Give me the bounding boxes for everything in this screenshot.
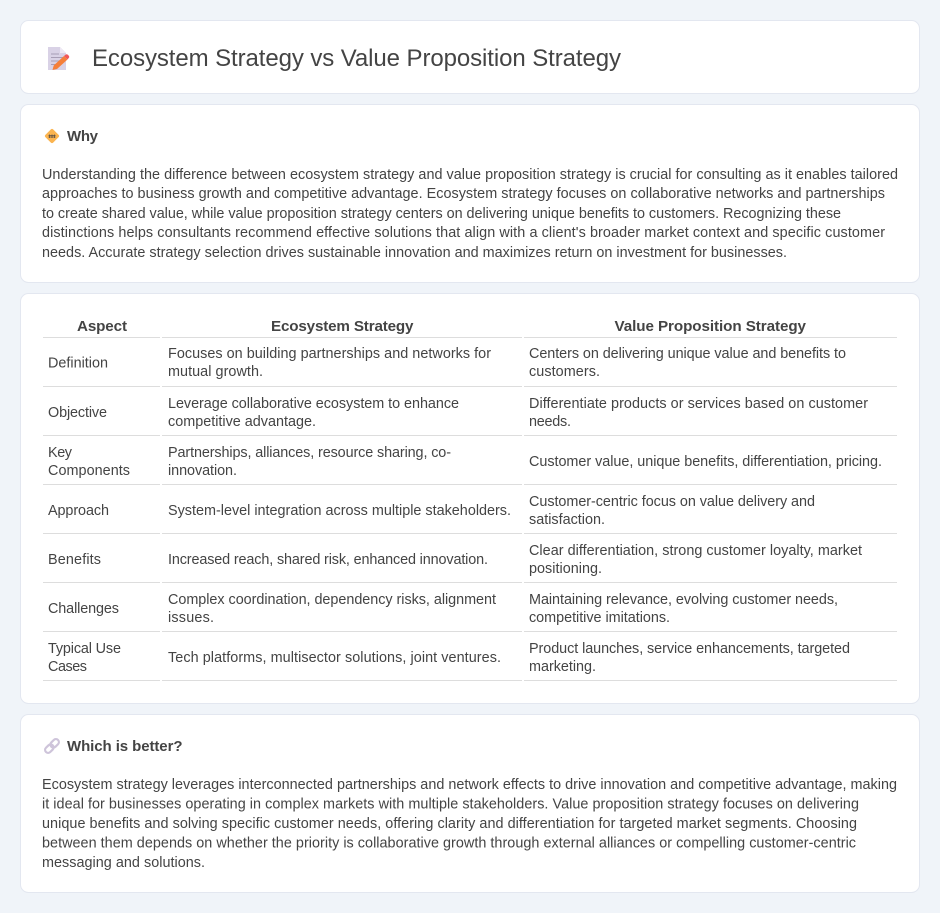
row: key components: innovation. xyxy=(168,463,237,479)
row: typical use cases xyxy=(48,641,850,675)
row: challenges: Complex coordination, dependency risks, alignment xyxy=(168,592,496,608)
row: challenges: issues. xyxy=(168,610,214,626)
text block: why paragraph: to create shared value, while value proposition strategy centers on delivering unique benefits to customers. Recognizing these xyxy=(42,206,841,222)
row: challenges xyxy=(48,592,838,626)
row: benefits: Benefits xyxy=(48,552,101,568)
row: approach: Approach xyxy=(48,503,109,519)
text block: which is better paragraph: unique benefits and solving specific customer needs, offering clarity and differentiation for targeted market segments. Choosing xyxy=(42,816,857,832)
row: approach xyxy=(48,494,815,528)
row: objective xyxy=(48,396,868,430)
icon: chain link xyxy=(44,738,60,754)
row: typical use cases: Typical Use xyxy=(48,641,121,657)
row: definition: Definition xyxy=(48,356,108,372)
text block: why paragraph: Understanding the difference between ecosystem strategy and value proposition strategy is crucial for consulting as it enables tailored xyxy=(42,167,898,183)
row: key components: Key xyxy=(48,445,73,461)
row: challenges: Maintaining relevance, evolving customer needs, xyxy=(529,592,838,608)
row: challenges: competitive imitations. xyxy=(529,610,670,626)
row: typical use cases: Tech platforms, multisector solutions, joint ventures. xyxy=(168,650,501,666)
table header: Ecosystem Strategy xyxy=(271,318,414,335)
table header: Value Proposition Strategy xyxy=(614,318,807,335)
row: key components xyxy=(48,445,882,479)
table header xyxy=(77,318,807,335)
text block: why paragraph: distinctions helps consultants recommend effective solutions that align with a client's broader market context and specific customer xyxy=(42,225,885,241)
panel: header xyxy=(20,20,920,94)
row: benefits: Clear differentiation, strong customer loyalty, market xyxy=(529,543,862,559)
title: Ecosystem Strategy vs Value Proposition Strategy xyxy=(92,45,621,72)
heading: why: Why xyxy=(67,128,99,145)
row: key components: Customer value, unique benefits, differentiation, pricing. xyxy=(529,454,882,470)
row: approach: System-level integration across multiple stakeholders. xyxy=(168,503,511,519)
row: objective: Leverage collaborative ecosystem to enhance xyxy=(168,396,459,412)
text block: which is better paragraph: it ideal for businesses operating in complex markets with multiple stakeholders. Value proposition strategy focuses on delivering xyxy=(42,796,859,812)
panel: comparison table xyxy=(20,294,920,704)
row: definition: mutual growth. xyxy=(168,364,263,380)
text block: which is better paragraph: Ecosystem strategy leverages interconnected partnerships and network effects to drive innovation and competitive advantage, making xyxy=(42,777,897,793)
row: approach: satisfaction. xyxy=(529,512,605,528)
row: benefits xyxy=(48,543,862,577)
text block: which is better paragraph: between them depends on whether the priority is collaborative growth through external alliances or compelling customer-centric xyxy=(42,836,856,852)
icon: document with pencil xyxy=(48,47,69,70)
panel: which is better xyxy=(20,714,920,892)
row: objective: Differentiate products or services based on customer xyxy=(529,396,868,412)
row: key components: Partnerships, alliances, resource sharing, co- xyxy=(168,445,451,461)
row: definition: customers. xyxy=(529,364,600,380)
row: key components: Components xyxy=(48,463,130,479)
text block: why paragraph: needs. Accurate strategy selection drives sustainable innovation and maximizes return on investment for businesses. xyxy=(42,245,787,261)
text block: which is better paragraph: messaging and solutions. xyxy=(42,855,205,871)
row: definition xyxy=(48,346,846,380)
row: approach: Customer-centric focus on value delivery and xyxy=(529,494,815,510)
row: definition: Focuses on building partnerships and networks for xyxy=(168,346,491,362)
panel: why xyxy=(20,104,920,282)
row: benefits: Increased reach, shared risk, enhanced innovation. xyxy=(168,552,488,568)
icon: warning diamond xyxy=(44,128,60,144)
text block: why paragraph xyxy=(42,167,898,261)
row: benefits: positioning. xyxy=(529,561,602,577)
row: objective: needs. xyxy=(529,414,571,430)
row: challenges: Challenges xyxy=(48,601,119,617)
row: objective: competitive advantage. xyxy=(168,414,316,430)
heading: which is better: Which is better? xyxy=(67,738,182,755)
row: typical use cases: marketing. xyxy=(529,659,596,675)
row: definition: Centers on delivering unique value and benefits to xyxy=(529,346,846,362)
row: objective: Objective xyxy=(48,405,107,421)
text block: why paragraph: approaches to business growth and competitive advantage. Ecosystem strategy focuses on collaborative networks and partnerships xyxy=(42,186,885,202)
row: typical use cases: Product launches, service enhancements, targeted xyxy=(529,641,850,657)
text block: which is better paragraph xyxy=(42,777,897,871)
table header: Aspect xyxy=(77,318,127,335)
row: typical use cases: Cases xyxy=(48,659,87,675)
